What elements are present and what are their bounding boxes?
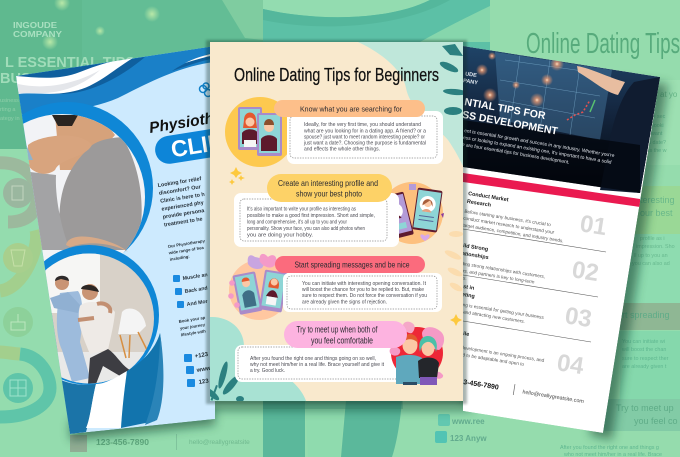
- panel: right flyer business development: [458, 46, 660, 433]
- tip 1: target audience, competition, and industry trends.: [462, 222, 564, 243]
- decorative page shapes: [203, 42, 467, 402]
- checklist: Back and: [184, 285, 208, 295]
- body text: long and comprehensive, it's all up to you and your: [247, 220, 347, 226]
- section 2: create an interesting profile: show your best photo: [296, 188, 362, 198]
- background: centre flyer teal shapes: www.ree: [451, 417, 485, 426]
- booking text: Book your ap: [178, 315, 206, 324]
- intro text: ess or looking to expand an existing one, it's important to have a solid: [463, 135, 612, 166]
- tip 2: ess.: [458, 275, 467, 281]
- footer contacts: [463, 379, 584, 403]
- photo: therapist with patient: [44, 245, 159, 385]
- body text: a try. Good luck.: [250, 368, 285, 374]
- background: phone and email footer: [70, 434, 250, 452]
- section 3: start spreading messages: Start spreading messages and be nice: [294, 260, 410, 270]
- body text: just want a date?. Choosing the purpose is fundamental: [303, 140, 426, 146]
- illustration: couple with hearts: [390, 322, 444, 385]
- background: right enlarged dating flyer: ll up to you an: [634, 253, 668, 259]
- heading: [463, 98, 558, 134]
- background: right enlarged dating flyer: at yo: [660, 90, 678, 99]
- body text: After you found the right one and things going on so well,: [250, 356, 376, 362]
- heading: NTIAL TIPS FOR: [463, 96, 547, 122]
- background: heading: [0, 55, 135, 87]
- tip 3: [463, 285, 544, 323]
- background: company name: [13, 21, 63, 39]
- number 01: 01: [578, 210, 609, 241]
- intro text: treatment to he: [164, 216, 203, 228]
- tip 1: Research: [466, 199, 491, 209]
- background: left dark header: [0, 0, 263, 149]
- tip 1: Conduct Market: [468, 191, 509, 203]
- background: right enlarged dating flyer: ts the w: [648, 148, 667, 154]
- background: right enlarged dating flyer: sure to respect ther: [622, 356, 669, 362]
- background: right enlarged dating flyer: Try to meet up: [616, 403, 674, 413]
- background: right enlarged dating flyer: u looki: [648, 123, 664, 129]
- tip 1: conduct market research to understand your: [463, 216, 555, 235]
- background: company name: INGOUDE: [13, 21, 58, 30]
- heading: SS DEVELOPMENT: [461, 109, 559, 138]
- section 4: try to meet up: [235, 321, 444, 385]
- illustration: two profiles on phones: [225, 97, 295, 167]
- section 4: try to meet up: Try to meet up when both of: [296, 324, 378, 334]
- footer contacts: hello@reallygreatsite.com: [522, 389, 585, 405]
- services text: [168, 240, 205, 261]
- booking text: [178, 316, 206, 336]
- section 1: know what you are searching for: Know what you are searching for: [300, 104, 402, 114]
- intro text: discomfort? Our: [159, 184, 202, 197]
- illustration: profile cards: [379, 182, 444, 244]
- number 03: 03: [563, 302, 594, 333]
- intro text: Clinic is here to h: [160, 192, 205, 205]
- background: right enlarged dating flyer: the sec: [648, 114, 666, 120]
- header pill: [274, 100, 425, 117]
- body text: spouse? just want to meet random interesting people? or: [304, 134, 425, 140]
- body text: are already given the signs of rejection.: [302, 300, 387, 306]
- background: right enlarged dating flyer: you feel co: [634, 416, 678, 426]
- tip 1: [462, 191, 569, 243]
- body text: You can initiate with interesting opening conversation. It: [302, 281, 427, 287]
- body text: [250, 356, 385, 374]
- body text: personality. Show your face, you can also add photos when: [247, 226, 365, 232]
- background: right enlarged dating flyer: are already given t: [622, 364, 667, 370]
- intro text: e are four essential tips for business development.: [461, 142, 570, 166]
- intro text: [158, 176, 204, 226]
- white card: [234, 193, 399, 247]
- services text: Our Physiotherapy: [167, 238, 206, 249]
- white card: [283, 273, 442, 312]
- background: heading: L ESSENTIAL TIPS: [5, 55, 135, 71]
- background: right enlarged dating flyer: [490, 0, 680, 457]
- background: intro text: ategy in: [0, 116, 20, 122]
- background: centre flyer teal shapes: 123 Anyw: [450, 434, 487, 443]
- contact rows: [184, 352, 211, 387]
- tip 2: ild Strong: [463, 243, 488, 253]
- illustration: chatting couple: [228, 254, 296, 320]
- background: process bands: [0, 163, 50, 417]
- background: right enlarged dating flyer: After you found the right one and things g: [560, 445, 659, 451]
- photo: shoulder treatment: [22, 102, 153, 271]
- section 3: start spreading messages: [228, 254, 442, 320]
- body text: [303, 122, 426, 152]
- body text: possible to make a good first impression. Short and simple,: [247, 213, 375, 219]
- tip 1: Before starting any business, it's crucial to: [464, 209, 552, 227]
- booking text: lifestyle with: [180, 328, 207, 337]
- background: right enlarged dating flyer: t want: [648, 131, 663, 137]
- body text: why not meet him/her in a real life. Brace yourself and give it: [250, 362, 385, 368]
- background: right enlarged dating flyer: our best: [640, 208, 673, 218]
- tip 2: ationships: [461, 251, 489, 261]
- background: phone and email footer: hello@reallygreatsite: [189, 439, 250, 446]
- background: right enlarged dating flyer: a date?: [648, 140, 666, 146]
- tip 3: st in: [463, 284, 475, 292]
- accent stripe: [463, 173, 640, 207]
- body text: you are doing your hobby.: [247, 232, 313, 238]
- contact rows: 123: [198, 378, 210, 386]
- services text: including:: [169, 254, 190, 262]
- number 02: 02: [570, 256, 601, 287]
- shadow: flyers: [70, 80, 668, 440]
- tip 2: [463, 243, 544, 284]
- checklist: Muscle an: [182, 272, 208, 282]
- bottom wave: [61, 333, 163, 434]
- background: intro text: usiness: [0, 98, 19, 104]
- header pill: [275, 256, 425, 273]
- section 2: create an interesting profile: Create an interesting profile and: [278, 178, 378, 188]
- body text: [302, 281, 427, 306]
- body text: what are you looking for in a dating app. A friend? or a: [304, 128, 426, 134]
- section 1: know what you are searching for: [225, 97, 443, 167]
- top waves: [16, 46, 215, 115]
- background: right enlarged dating flyer: You can initiate wi: [622, 339, 665, 345]
- background: right enlarged dating flyer: rt spreading: [622, 310, 670, 320]
- panel: left flyer physiotherapy clinic: [16, 46, 215, 434]
- title: Physiotherapy: [148, 103, 257, 137]
- background: heading: BUS: [0, 71, 31, 87]
- tip 4: development is an ongoing process, and: [461, 345, 545, 363]
- tip 2: iers, and partners is key to long-term: [459, 268, 535, 285]
- background: intro text: rting a: [0, 107, 16, 113]
- tip 4: ed to be adaptable and open to: [460, 352, 525, 367]
- white card: [287, 111, 443, 164]
- body text: and effects the whole other things.: [304, 146, 380, 152]
- body text: [247, 206, 375, 238]
- background: company name: COMPANY: [13, 30, 63, 39]
- section 4: try to meet up: you feel comfortable: [311, 336, 373, 346]
- title: Online Dating Tips for Beginners: [234, 65, 439, 85]
- photo header: [463, 46, 660, 193]
- tip 4: ile: [463, 331, 470, 338]
- brand name: [463, 72, 478, 84]
- panel: centre flyer online dating tips: [203, 40, 467, 404]
- background: intro text: [0, 98, 20, 122]
- brand name: PANY: [463, 78, 479, 86]
- tip 4: [463, 331, 544, 366]
- header pill: [267, 174, 392, 202]
- white card: [235, 345, 430, 382]
- background: right enlarged dating flyer: you can also ad: [632, 261, 670, 267]
- background: centre flyer teal shapes: [263, 0, 490, 457]
- header pill: [284, 321, 407, 348]
- background: step icons: [3, 178, 33, 403]
- background: right enlarged dating flyer: teresting: [640, 195, 675, 205]
- contact rows: +123: [194, 352, 209, 360]
- tip 3: eting: [461, 292, 475, 300]
- checklist: And Mor: [186, 299, 208, 308]
- number 04: 04: [555, 349, 586, 380]
- tip 2: lding strong relationships with customers,: [460, 261, 545, 279]
- brand name: UDE: [465, 71, 477, 79]
- background: right enlarged dating flyer: profile as i: [640, 236, 665, 242]
- tip 3: d and attracting new customers.: [459, 309, 525, 324]
- intro text: Looking for relief: [157, 176, 202, 189]
- body text: sure to respect them. Do not force the conversation if you: [302, 293, 427, 299]
- booking text: your journey: [179, 322, 206, 331]
- services text: wide range of hea: [167, 245, 205, 256]
- background: right enlarged dating flyer: impression. Sho: [636, 244, 675, 250]
- body text: will boost the chance for you to be replied to. But, make: [302, 287, 424, 293]
- intro text: ent is essential for growth and success in any industry. Whether you're: [464, 128, 615, 159]
- background: right enlarged dating flyer: will boost the chan: [621, 347, 666, 353]
- clinic pill: [155, 129, 210, 164]
- contact rows: www: [195, 366, 211, 374]
- section 2: create an interesting profile: [234, 174, 444, 247]
- footer contacts: 3-456-7890: [463, 379, 499, 392]
- body text: Ideally, for the very first time, you should understand: [304, 122, 421, 128]
- checklist: [173, 272, 208, 308]
- tip 3: ting is essential for getting your business: [460, 302, 545, 320]
- logo: [200, 83, 212, 96]
- intro text: provide persona: [162, 208, 206, 221]
- clinic pill: CLINIC: [169, 125, 249, 162]
- body text: It's also important to write your profile as interesting as: [247, 206, 356, 212]
- intro text: experienced phy: [161, 200, 204, 213]
- background: phone and email footer: 123-456-7890: [96, 437, 149, 447]
